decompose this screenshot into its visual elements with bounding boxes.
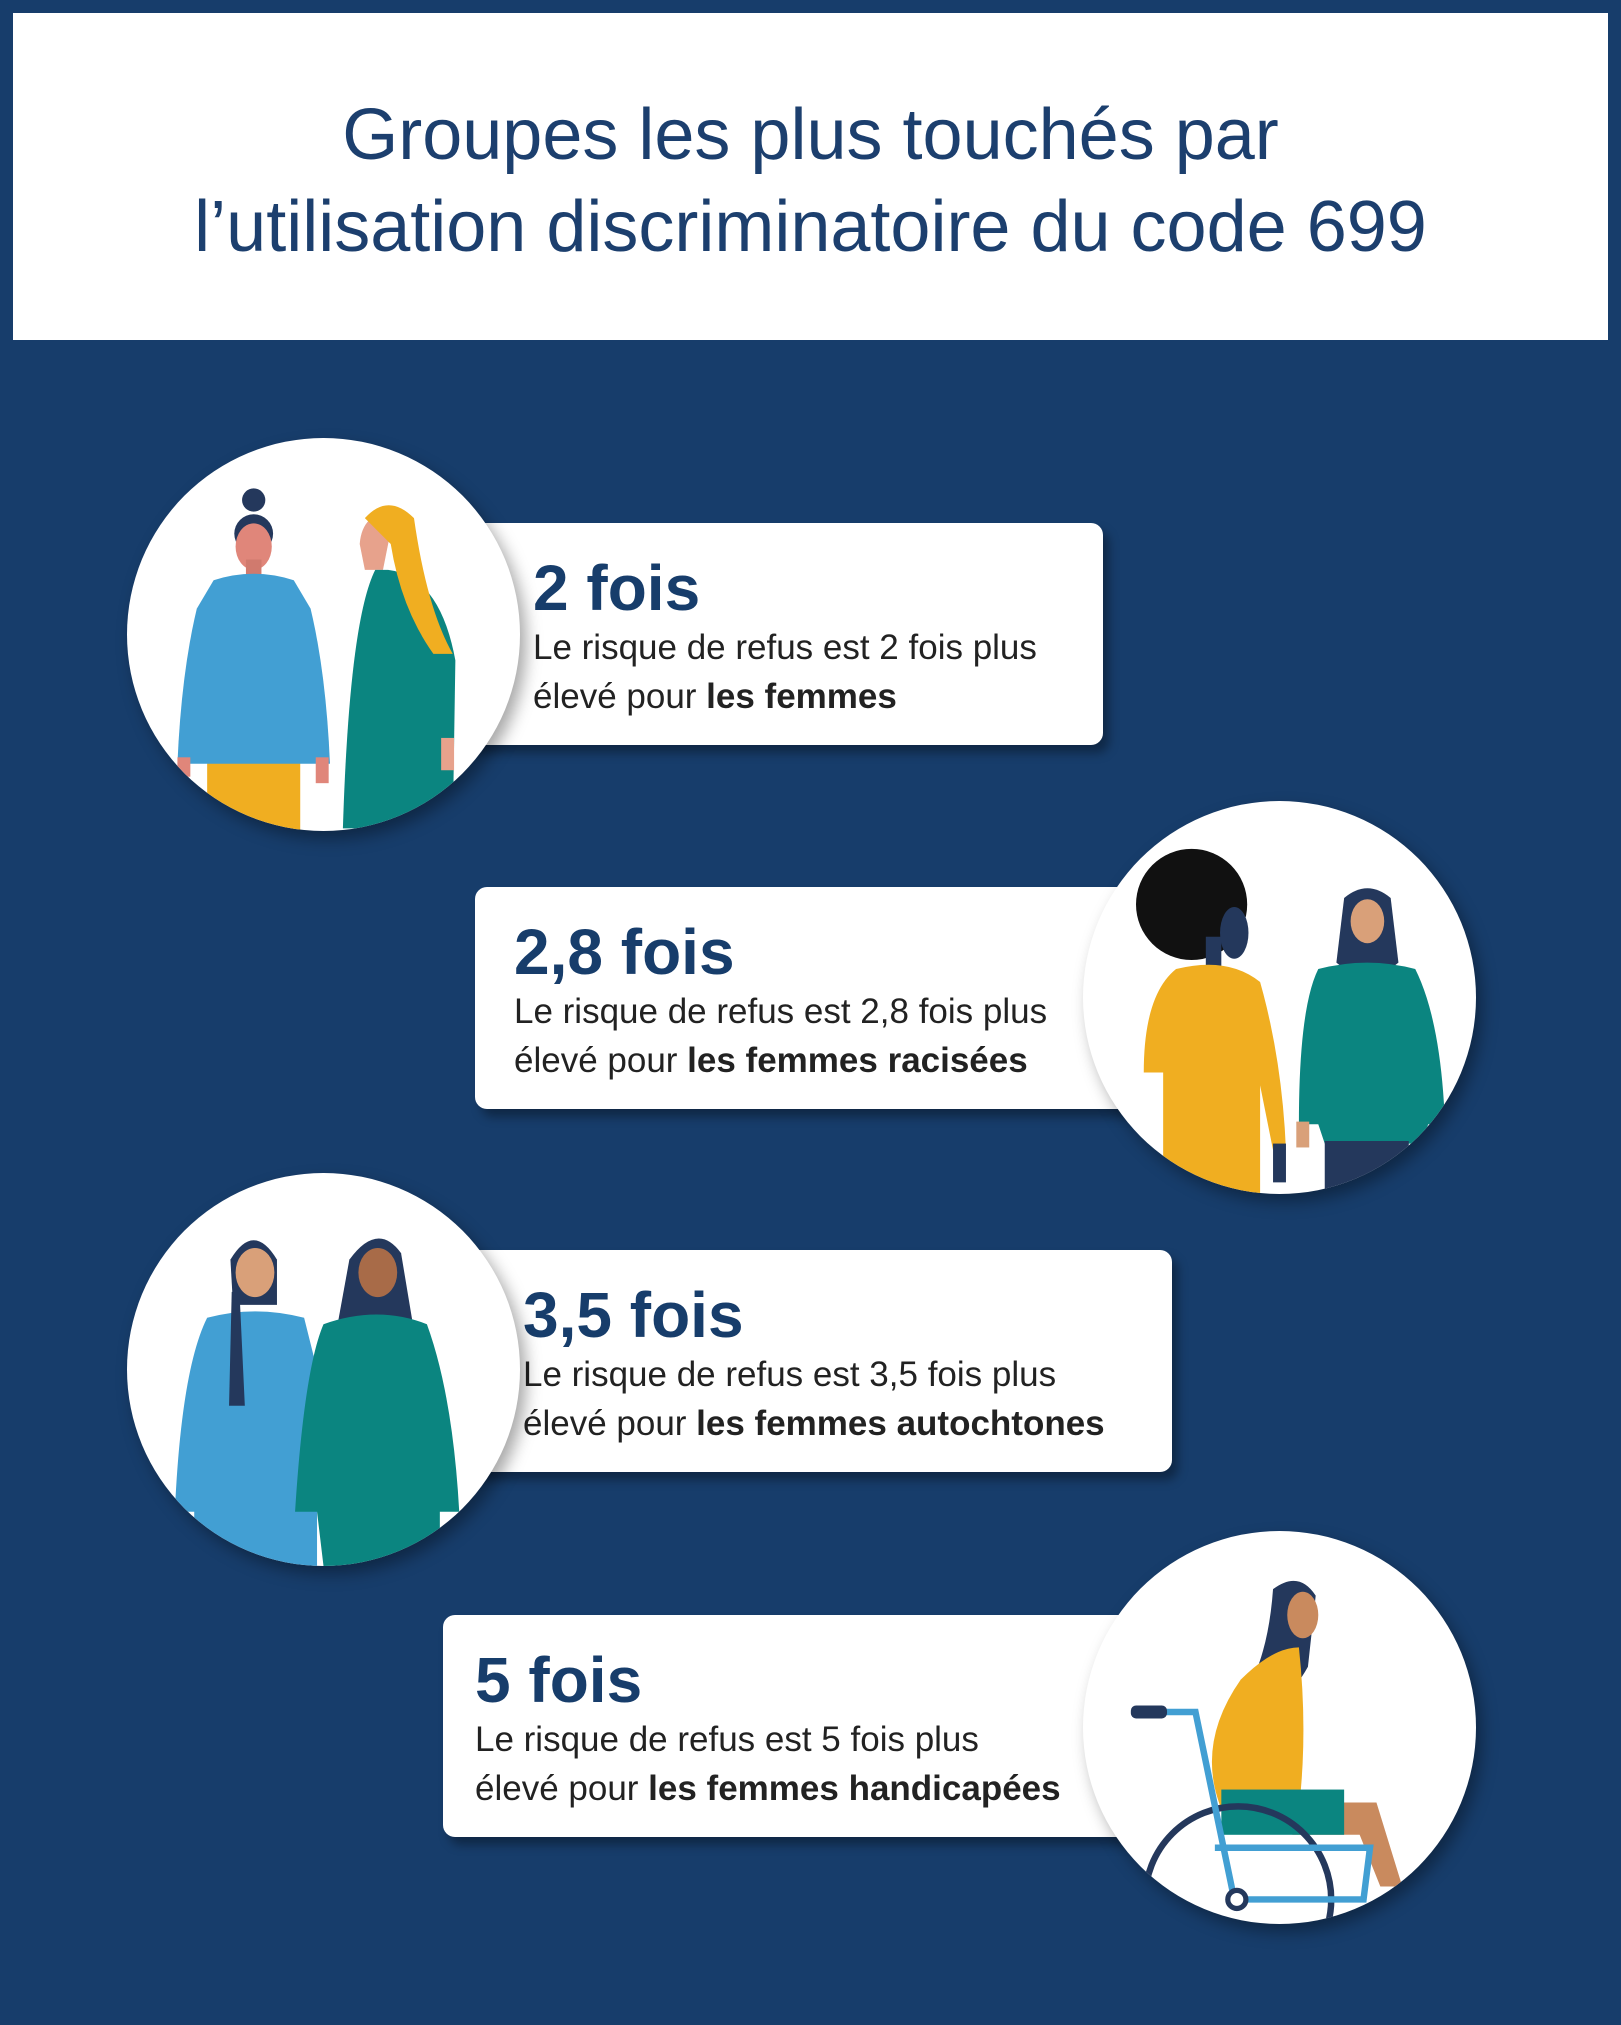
text block: 2,8 fois (514, 916, 1047, 1080)
icon: two women circle 1 (127, 438, 536, 845)
title (194, 95, 1427, 267)
panel: 2 fois (440, 523, 1103, 745)
text block: 2,8 fois: Le risque de refus est 2,8 fois plus (514, 992, 1047, 1031)
text block: 5 fois (475, 1644, 1061, 1808)
text block: 3,5 fois: élevé pour les femmes autochtones (523, 1404, 1105, 1443)
text block: 3,5 fois: Le risque de refus est 3,5 fois plus (523, 1355, 1056, 1394)
text block: 5 fois: élevé pour les femmes handicapées (475, 1769, 1061, 1808)
panel: 5 fois (443, 1615, 1153, 1837)
title: Groupes les plus touchés par (342, 95, 1279, 175)
text block: 2 fois: 2 fois (533, 552, 700, 624)
icon: two women circle 2 (1079, 801, 1488, 1208)
text block: 3,5 fois: 3,5 fois (523, 1279, 744, 1351)
text block: 3,5 fois (523, 1279, 1105, 1443)
panel: 3,5 fois (445, 1250, 1172, 1472)
text block: 2,8 fois: 2,8 fois (514, 916, 735, 988)
text block: 2,8 fois: élevé pour les femmes racisées (514, 1041, 1028, 1080)
text block: 2 fois (533, 552, 1037, 716)
header panel (13, 13, 1608, 340)
text block: 2 fois: Le risque de refus est 2 fois plus (533, 628, 1037, 667)
text block: 5 fois: Le risque de refus est 5 fois plus (475, 1720, 979, 1759)
icon: two women circle 3 (127, 1173, 536, 1580)
text block: 2 fois: élevé pour les femmes (533, 677, 897, 716)
panel: 2,8 fois (475, 887, 1155, 1109)
icon: woman in wheelchair circle 4 (1079, 1531, 1488, 1938)
text block: 5 fois: 5 fois (475, 1644, 642, 1716)
title: l’utilisation discriminatoire du code 699 (194, 187, 1427, 267)
